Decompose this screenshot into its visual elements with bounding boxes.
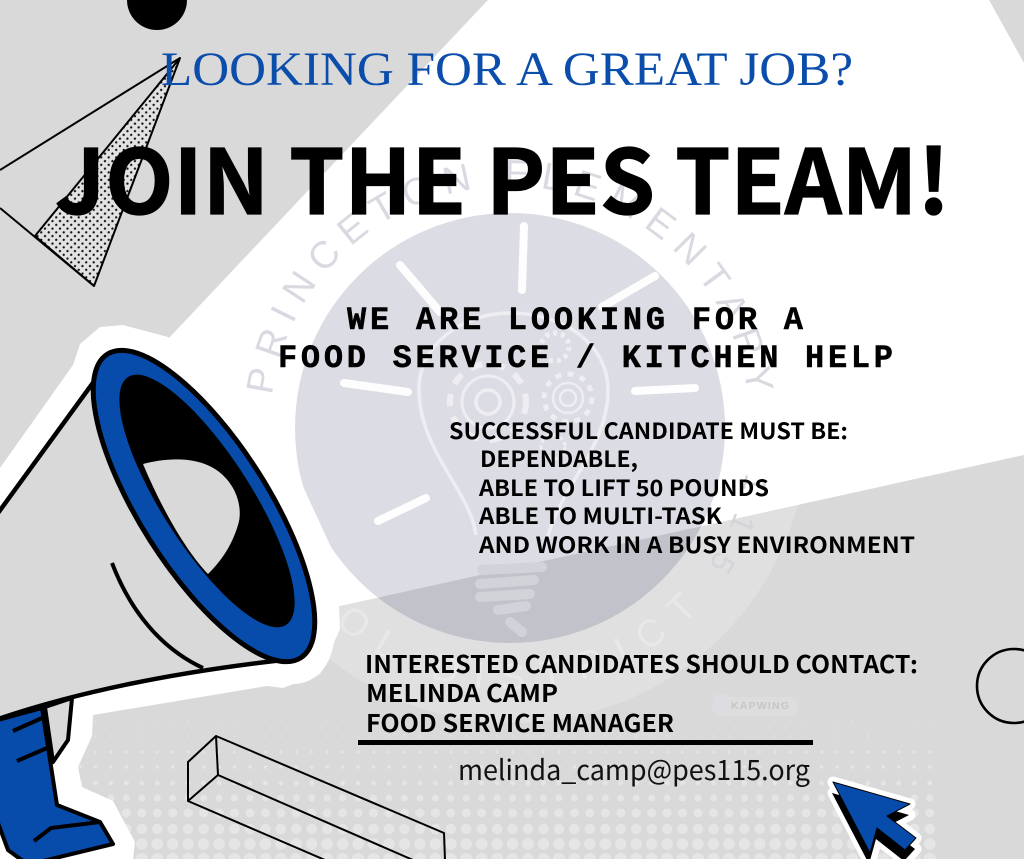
outline circle, right edge — [977, 649, 1024, 723]
cursor black shadow — [832, 793, 915, 859]
outline edges — [0, 58, 180, 170]
megaphone halo around bell — [22, 288, 386, 724]
megaphone — [0, 288, 386, 859]
job heading line 1: WE ARE LOOKING FOR A — [347, 302, 804, 339]
lower edge — [0, 208, 94, 286]
light bulb rays — [344, 226, 695, 521]
Kapwing watermark — [712, 695, 798, 716]
watermark word: KAPWING — [731, 700, 789, 712]
watermark mascot icon — [714, 695, 727, 715]
divider rule — [358, 740, 813, 745]
requirement: multi-task: ABLE TO MULTI-TASK — [478, 499, 723, 531]
job heading — [278, 302, 893, 377]
seal lettering: right arc: 115 — [712, 475, 766, 574]
watermark pill — [712, 697, 798, 716]
contact lead-in: INTERESTED CANDIDATES SHOULD CONTACT: — [365, 645, 918, 680]
background: white diagonal band — [0, 0, 1024, 681]
requirement: lift: ABLE TO LIFT 50 POUNDS — [478, 471, 769, 503]
seal lettering: bottom arc: OL DISTRICT — [341, 592, 692, 690]
requirement: busy environment: AND WORK IN A BUSY ENVIRONMENT — [478, 528, 915, 560]
title: looking for a great job: LOOKING FOR A GREAT JOB? — [161, 43, 853, 96]
dotted paper-cone triangle — [0, 58, 180, 286]
contact details — [365, 645, 918, 739]
contact email: melinda_camp@pes115.org — [458, 749, 810, 789]
megaphone horn body — [0, 382, 283, 719]
candidate requirements — [449, 414, 915, 560]
horn outline — [0, 380, 283, 719]
megaphone handle strap — [45, 698, 72, 762]
cursor blue arrow — [833, 782, 916, 853]
dotted face — [35, 58, 180, 286]
beam long edges — [188, 736, 445, 859]
horn curved crease — [112, 563, 203, 668]
megaphone handle — [0, 708, 113, 859]
contact role: FOOD SERVICE MANAGER — [366, 704, 674, 739]
black circle, top — [127, 0, 187, 30]
seal lettering: top arc: PRINCETON ELEMENTARY — [246, 160, 774, 392]
megaphone black bell interior — [90, 353, 324, 649]
contact name: MELINDA CAMP — [366, 674, 558, 709]
light bulb outline — [419, 313, 608, 545]
cursor arrow icon — [832, 782, 916, 859]
requirements lead-in: SUCCESSFUL CANDIDATE MUST BE: — [449, 414, 848, 446]
halftone dot field — [80, 705, 940, 859]
watermark logo: school seal — [246, 160, 774, 690]
3D outlined beam — [188, 736, 445, 859]
cursor white halo — [833, 782, 916, 859]
megaphone grey cone highlight — [143, 459, 240, 574]
light bulb gears — [450, 333, 592, 459]
handle details — [13, 718, 100, 841]
megaphone blue bell rim — [53, 320, 355, 692]
megaphone white sticker halo — [0, 325, 340, 859]
requirement: dependable: DEPENDABLE, — [480, 442, 638, 474]
seal inner disc — [295, 213, 725, 643]
title: join the PES team: JOIN THE PES TEAM! — [55, 111, 950, 240]
job heading line 2: FOOD SERVICE / KITCHEN HELP — [278, 340, 893, 377]
seal outer ring — [218, 133, 808, 723]
light bulb screw base — [480, 567, 542, 632]
